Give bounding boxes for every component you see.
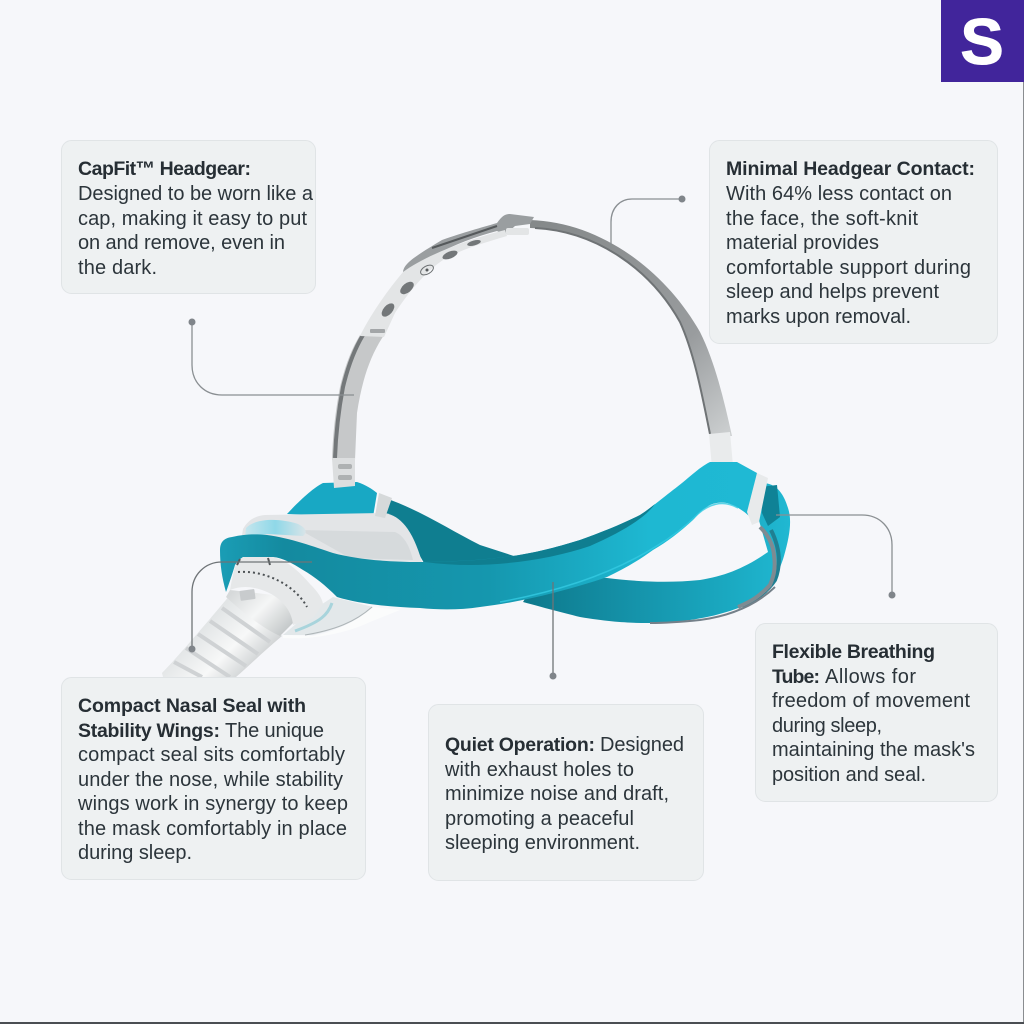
callout line: breathing tube <box>776 515 896 598</box>
panel: quiet operation: with exhaust holes to <box>444 759 634 781</box>
panel: compact nasal seal: compact seal sits comfortably <box>78 744 345 766</box>
panel: flexible breathing tube: Flexible Breathing <box>772 641 935 663</box>
tube sleeve <box>226 590 294 636</box>
seal inner outline <box>300 530 413 560</box>
panel: minimal headgear contact: the face, the soft-knit <box>726 208 918 230</box>
tube ribs <box>174 608 270 677</box>
panel: compact nasal seal: wings work in synergy to keep <box>77 793 348 815</box>
panel: quiet operation: promoting a peaceful <box>445 808 634 830</box>
panel: minimal headgear contact: sleep and helps prevent <box>726 281 939 303</box>
panel: quiet operation: minimize noise and draft, <box>445 783 669 805</box>
tube connector <box>230 557 323 625</box>
panel: compact nasal seal: the mask comfortably in place <box>78 818 347 840</box>
seal frame <box>240 513 422 562</box>
panel: quiet operation <box>428 704 704 880</box>
panel: CapFit headgear: on and remove, even in <box>78 232 285 254</box>
headgear arch left <box>332 335 384 460</box>
dark strip between edges <box>742 530 779 606</box>
panel: minimal headgear contact: marks upon removal. <box>726 306 911 328</box>
clip right <box>709 432 733 468</box>
panel: minimal headgear contact <box>710 140 998 344</box>
clip left <box>332 458 355 488</box>
adjuster top layer <box>403 214 534 272</box>
logo badge: S <box>960 5 1004 78</box>
panel: CapFit headgear: cap, making it easy to put <box>78 208 307 230</box>
panel: minimal headgear contact: comfortable support during <box>726 257 971 279</box>
strap buckle right <box>747 473 768 525</box>
teal bubble <box>245 520 306 537</box>
panel: compact nasal seal: under the nose, while stability <box>78 769 343 791</box>
nasal seal lower <box>283 597 373 635</box>
panel: compact nasal seal: Stability Wings: <box>78 720 220 742</box>
panel: compact nasal seal: Compact Nasal Seal with <box>78 695 306 717</box>
top left teal panel <box>287 482 377 517</box>
panel: compact nasal seal: The unique <box>225 720 324 742</box>
panel: flexible breathing tube: during sleep, <box>772 715 882 737</box>
tube <box>162 595 282 677</box>
panel: flexible breathing tube: Tube: <box>772 666 820 688</box>
panel: quiet operation: sleeping environment. <box>445 832 640 854</box>
panel: quiet operation: Designed <box>600 734 684 756</box>
panel: compact nasal seal: during sleep. <box>78 842 192 864</box>
logo badge <box>941 0 1024 82</box>
callout line: nasal seal <box>188 562 312 652</box>
front strap highlight <box>500 504 738 602</box>
adjuster pale strap <box>360 230 507 337</box>
front strap <box>220 462 757 609</box>
mask illustration <box>162 214 790 677</box>
panel: CapFit headgear: CapFit™ Headgear: <box>78 158 251 180</box>
panel: flexible breathing tube <box>756 624 998 802</box>
panel: minimal headgear contact: With 64% less contact on <box>726 183 952 205</box>
adjuster clip <box>506 228 529 235</box>
back strap dark <box>385 498 520 580</box>
arch outer dark edge <box>335 335 363 458</box>
panel: compact nasal seal <box>62 678 366 880</box>
panel: quiet operation: Quiet Operation: <box>445 734 595 756</box>
panel: minimal headgear contact: material provides <box>726 232 879 254</box>
panel: flexible breathing tube: maintaining the mask's <box>772 739 975 761</box>
panel: CapFit headgear: the dark. <box>78 257 157 279</box>
dark inner strap fold <box>760 485 780 526</box>
panel: minimal headgear contact: Minimal Headgear Contact: <box>726 158 975 180</box>
strap buckle left <box>375 493 392 518</box>
seal white glow <box>283 607 400 638</box>
strap grey edge <box>738 527 775 607</box>
front strap dark top side <box>425 504 655 565</box>
headgear arch right <box>530 220 732 436</box>
strap holes <box>379 301 397 319</box>
panel: flexible breathing tube: Allows for <box>825 666 916 688</box>
panel: CapFit headgear <box>62 140 316 294</box>
lower strap <box>523 483 790 623</box>
panel: flexible breathing tube: freedom of movement <box>772 690 970 712</box>
callout line: quiet operation <box>550 582 556 680</box>
callout line: minimal headgear contact <box>611 196 686 250</box>
panel: CapFit headgear: Designed to be worn like a <box>78 183 314 205</box>
panel: flexible breathing tube: position and seal. <box>772 764 926 786</box>
callout line: CapFit headgear <box>188 318 354 395</box>
